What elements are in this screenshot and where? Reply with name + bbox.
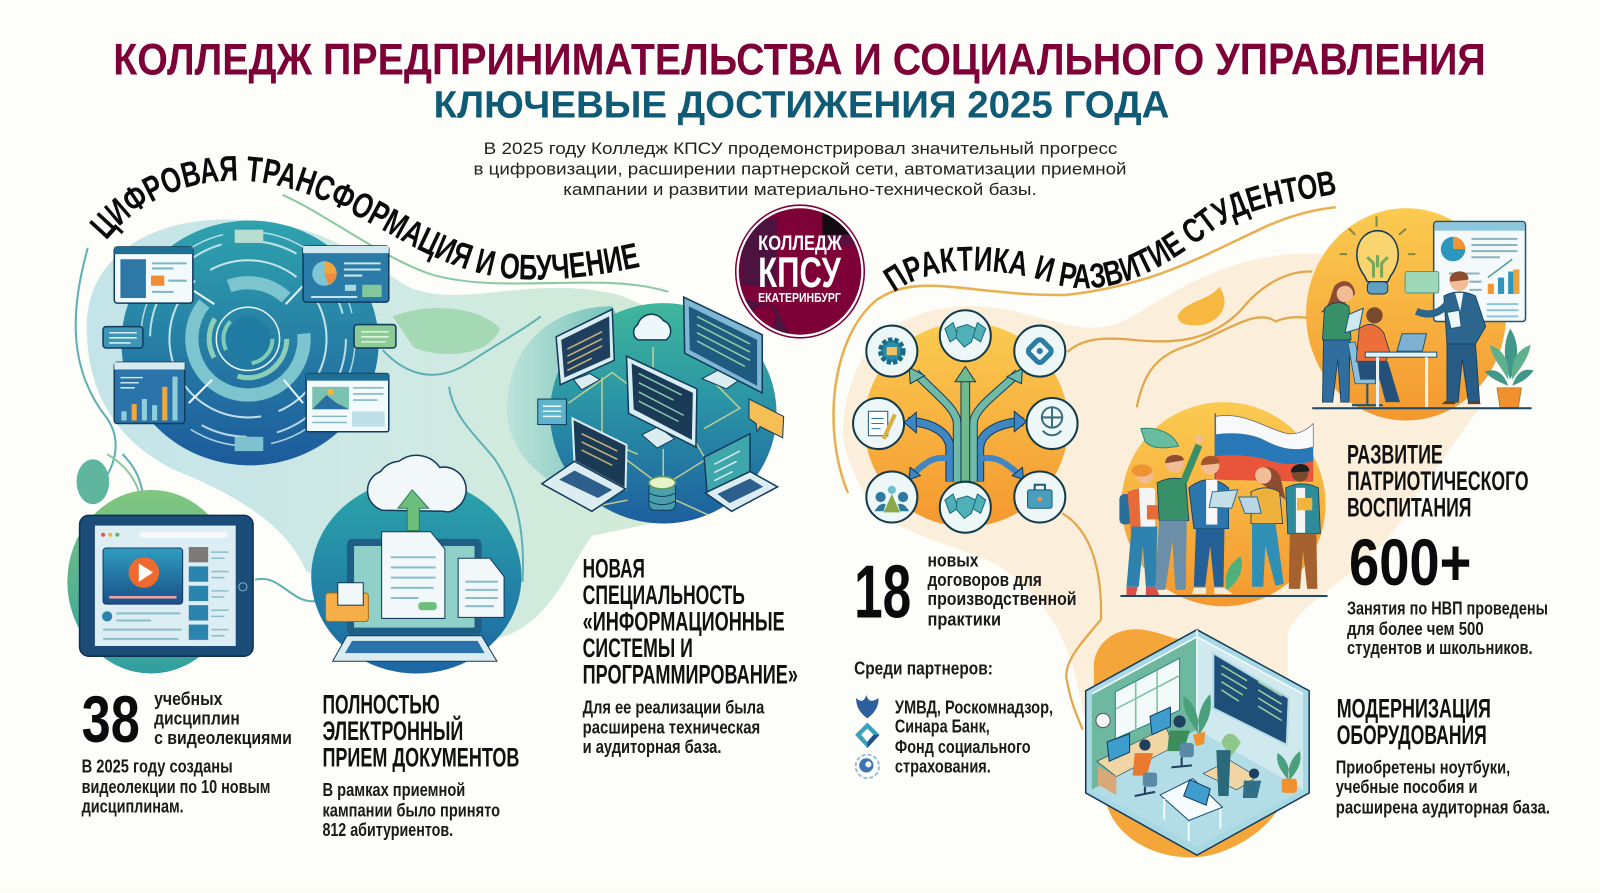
illustration: teacher and students [1306, 208, 1534, 420]
card: top left [114, 247, 193, 303]
illustration: isometric classroom [1086, 629, 1309, 857]
stat: 18 contracts: 18 [854, 550, 911, 634]
video player [103, 548, 183, 604]
partners list: Фонд социального [895, 736, 1031, 757]
block: electronic admission: ПРИЕМ ДОКУМЕНТОВ [322, 742, 519, 772]
student 2 [1155, 435, 1203, 590]
block: patriotic education [1347, 439, 1548, 658]
card: bar chart [114, 362, 185, 424]
stat: 18 contracts [854, 549, 1077, 634]
student 5 [1286, 464, 1320, 589]
illustration: computer network [507, 297, 784, 524]
left pale blob [87, 219, 714, 638]
block: patriotic education: Занятия по НВП проведены [1347, 597, 1548, 618]
monitor right [684, 297, 762, 393]
block: equipment modernization: ОБОРУДОВАНИЯ [1337, 720, 1487, 750]
block: equipment modernization: расширена аудиторная база. [1336, 796, 1550, 817]
intro text: кампании и развитии материально-технической базы. [563, 180, 1037, 199]
card: mid left [103, 327, 143, 348]
intro text: в цифровизации, расширении партнерской сети, автоматизации приемной [473, 160, 1127, 179]
block: new specialty: СПЕЦИАЛЬНОСТЬ [583, 580, 745, 610]
student 1 [1119, 464, 1159, 595]
icon: social fund [856, 755, 879, 778]
logo: college badge: КПСУ [758, 249, 842, 297]
stat: 38 disciplines: В 2025 году созданы [82, 756, 233, 777]
logo: college badge: КОЛЛЕДЖ [758, 231, 842, 255]
desks and people [1097, 707, 1261, 841]
block: equipment modernization [1336, 693, 1550, 817]
partners list: УМВД, Роскомнадзор, [895, 696, 1053, 717]
document small [458, 558, 504, 617]
block: new specialty: ПРОГРАММИРОВАНИЕ» [583, 660, 798, 690]
monitor centre [627, 356, 697, 448]
windows [1115, 658, 1180, 739]
student 4 [1239, 467, 1286, 587]
block: new specialty: Для ее реализации была [583, 696, 765, 717]
partners list: Среди партнеров: [854, 658, 993, 679]
speech bubble [749, 399, 784, 438]
intro text [473, 139, 1127, 199]
stat: 38 disciplines: дисциплин [154, 708, 240, 729]
cloud upload icon [368, 455, 466, 531]
lecture playlist [189, 547, 229, 640]
desk with laptop [1365, 334, 1437, 407]
stat: 38 disciplines [82, 683, 292, 816]
block: electronic admission: ЭЛЕКТРОННЫЙ [322, 716, 463, 746]
stat: 38 disciplines: дисциплинам. [82, 795, 184, 816]
right flow lines [833, 207, 1336, 730]
cloud icon [634, 314, 671, 340]
left section heading (curved): ЦИФРОВАЯ ТРАНСФОРМАЦИЯ И ОБУЧЕНИЕ [89, 156, 640, 280]
icon circles [853, 310, 1078, 533]
stat: 18 contracts: договоров для [928, 569, 1042, 590]
russian flag [1215, 413, 1313, 482]
icon: diamond [855, 723, 880, 748]
stat: 38 disciplines: видеолекции по 10 новым [82, 776, 270, 797]
block: new specialty: НОВАЯ [583, 554, 645, 584]
subtitle: КЛЮЧЕВЫЕ ДОСТИЖЕНИЯ 2025 ГОДА [434, 83, 1169, 125]
stat: 38 disciplines: с видеолекциями [154, 727, 292, 748]
stat: 18 contracts: практики [928, 609, 1001, 630]
icon: emblem [856, 695, 879, 718]
illustration: video lecture tablet [67, 459, 253, 674]
plants [1183, 694, 1301, 793]
illustration: students with flag [1119, 402, 1328, 606]
student 3 [1189, 456, 1238, 594]
block: electronic admission: ПОЛНОСТЬЮ [322, 689, 440, 719]
blackboard [1213, 653, 1289, 745]
network back lobe [507, 306, 663, 510]
card: top right with pie [303, 246, 389, 302]
block: electronic admission: кампании было принято [322, 799, 500, 820]
right section heading (curved): ПРАКТИКА И РАЗВИТИЕ СТУДЕНТОВ [882, 172, 1336, 292]
block: new specialty: СИСТЕМЫ И [583, 633, 693, 663]
logo: college badge [736, 205, 864, 339]
monitor left [556, 309, 614, 390]
seated student [1348, 307, 1400, 405]
block: electronic admission [322, 689, 519, 840]
block: patriotic education: студентов и школьников. [1347, 637, 1533, 658]
light bulb [1340, 216, 1415, 294]
card: picture [306, 374, 389, 432]
document large [382, 532, 445, 618]
green blob behind network [393, 308, 500, 354]
block: new specialty: расширена техническая [583, 717, 760, 738]
stat: 38 disciplines: учебных [154, 688, 223, 709]
block: new specialty: «ИНФОРМАЦИОННЫЕ [583, 607, 785, 637]
presentation board [1434, 222, 1526, 322]
illustration: digital dial with dashboards [103, 220, 396, 465]
leaf [1141, 428, 1179, 448]
block: new specialty [583, 554, 798, 757]
block: electronic admission: 812 абитуриентов. [322, 819, 453, 840]
block: new specialty: и аудиторная база. [583, 736, 721, 757]
partners list: Синара Банк, [895, 716, 990, 737]
partners list: страхования. [895, 756, 991, 777]
laptop [333, 539, 497, 661]
illustration: electronic documents laptop [311, 455, 521, 674]
orange teardrop [1178, 287, 1224, 325]
block: equipment modernization: учебные пособия и [1336, 776, 1478, 797]
folder [326, 583, 368, 622]
logo: college badge: ЕКАТЕРИНБУРГ [758, 290, 841, 305]
card: mid right [354, 325, 396, 348]
partners list [854, 658, 1053, 778]
presenter [1416, 271, 1486, 404]
icon glyphs [881, 340, 903, 362]
orange backdrop [1094, 629, 1288, 857]
laptop left [542, 418, 627, 511]
left flow lines [76, 195, 668, 601]
database icon [649, 477, 676, 510]
stat: 18 contracts: новых [928, 549, 979, 570]
small plant [1226, 556, 1242, 590]
block: patriotic education: РАЗВИТИЕ [1347, 439, 1443, 469]
right peach blob [843, 254, 1480, 714]
stat: 38 disciplines: 38 [82, 683, 140, 757]
stat: 18 contracts: производственной [928, 588, 1077, 609]
illustration: partnership network [853, 310, 1078, 533]
clock [1096, 713, 1110, 728]
woman with folder [1320, 281, 1363, 402]
block: equipment modernization: МОДЕРНИЗАЦИЯ [1337, 693, 1491, 723]
block: equipment modernization: Приобретены ноутбуки, [1336, 757, 1510, 778]
plant [1485, 329, 1534, 407]
intro text: В 2025 году Колледж КПСУ продемонстрировал значительный прогресс [484, 139, 1117, 158]
small document [538, 399, 566, 425]
block: electronic admission: В рамках приемной [322, 779, 465, 800]
laptop right [704, 434, 778, 511]
block: patriotic education: для более чем 500 [1347, 618, 1484, 639]
branching arrows [908, 373, 1023, 486]
block: patriotic education: 600+ [1349, 526, 1471, 600]
block: patriotic education: ВОСПИТАНИЯ [1347, 492, 1471, 522]
